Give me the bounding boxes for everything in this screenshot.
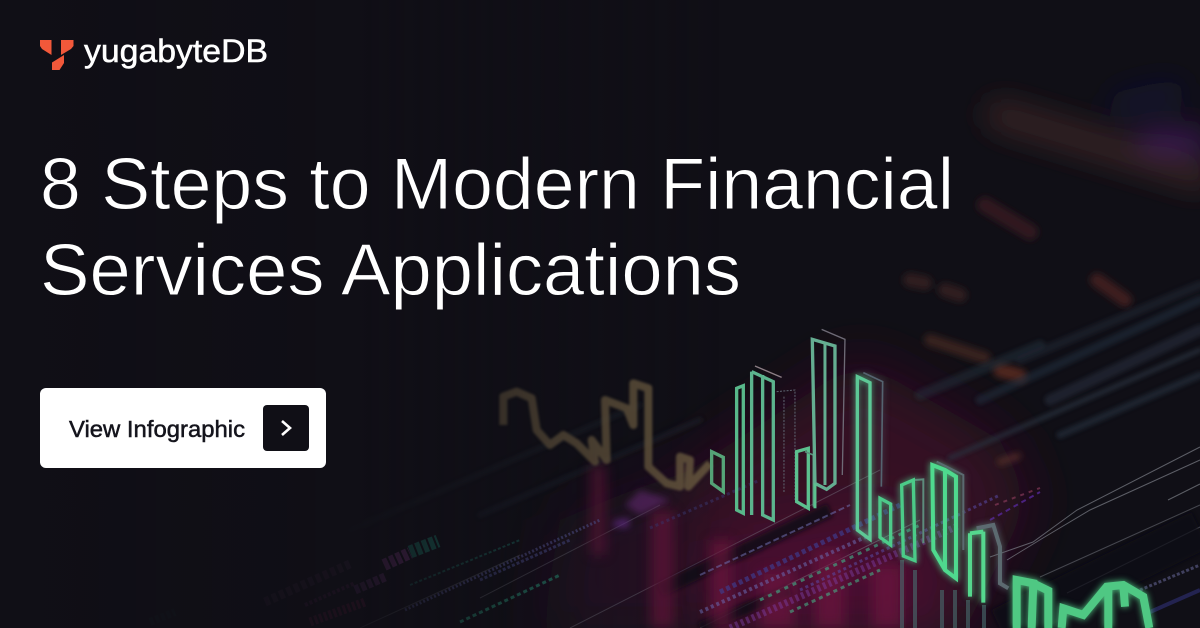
grey-green bar reflections	[902, 560, 984, 628]
bar G	[932, 462, 963, 578]
purple reflection patch	[612, 490, 670, 528]
bar B	[752, 366, 782, 520]
title: 8 Steps to Modern Financial	[40, 144, 954, 225]
tall bar D	[812, 329, 845, 508]
bar F	[902, 480, 915, 561]
crimson glow behind chart	[540, 360, 1030, 628]
bar pair A	[737, 386, 743, 513]
title: Services Applications	[40, 230, 741, 311]
button label: View Infographic	[69, 416, 245, 442]
blurred olive trend line (far bars)	[503, 383, 710, 487]
dark diagonal bands on floor	[660, 510, 1200, 628]
blurred upper streaks	[1000, 95, 1200, 175]
green neon chart bars, left cluster	[712, 329, 845, 520]
crimson column reflections	[590, 465, 902, 628]
dim dotted bar	[777, 390, 795, 500]
logo icon	[40, 40, 74, 70]
logo wordmark: yugabyteDB	[84, 33, 268, 69]
thin lines of the chart floor	[360, 447, 1200, 628]
icon: chevron button	[263, 405, 309, 451]
bar H	[970, 525, 1008, 603]
button: view infographic	[40, 388, 326, 468]
green neon chart bars, right cluster	[857, 373, 1149, 628]
logo	[40, 33, 268, 70]
tall bar E	[857, 373, 883, 539]
short bar next to E	[880, 498, 891, 545]
small bar C	[797, 448, 808, 508]
title	[40, 144, 954, 311]
blurred orange bokeh	[910, 205, 1125, 462]
small bar at left	[712, 452, 723, 492]
blue-grey wide streaks	[350, 285, 1200, 530]
thick foreground trend line	[1017, 580, 1149, 628]
glitchy ticker data dashes	[150, 480, 1200, 628]
